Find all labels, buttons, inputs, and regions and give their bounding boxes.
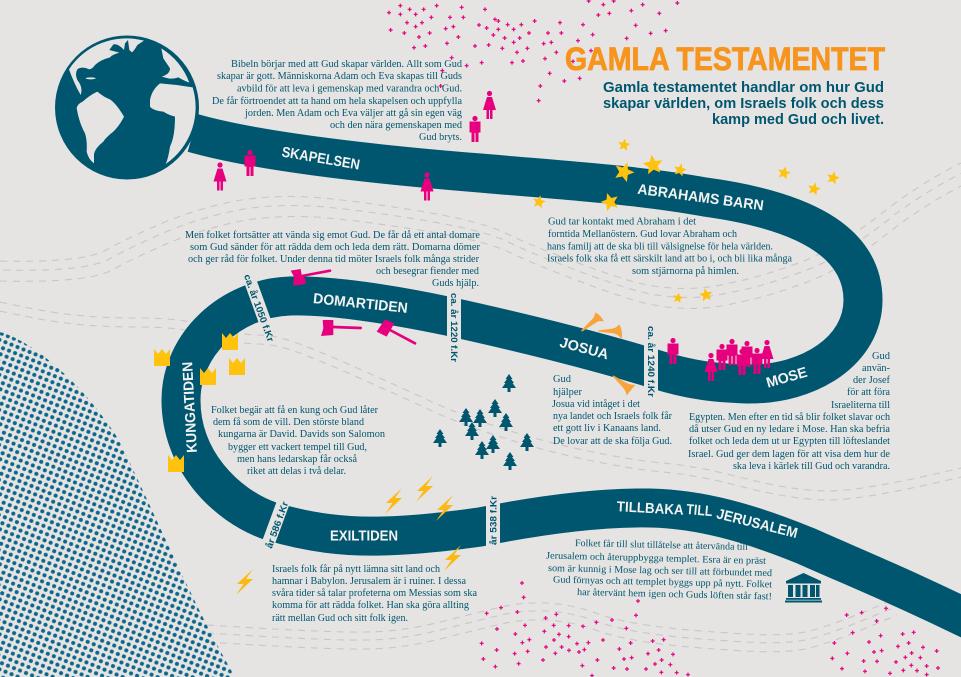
text: Skapelsen: jorden. Men Adam och Eva väljer att gå sin egen väg (244, 108, 462, 119)
text: Exiltiden (272, 564, 478, 624)
text: Kungatiden: riket att delas i två delar. (247, 466, 346, 477)
text: Domartiden: som Gud sänder för att rädda dem och leda dem rätt. Domarna dömer (190, 242, 481, 253)
text: Exiltiden: rätt mellan Gud och sitt folk igen. (272, 613, 408, 624)
icons: trumpets (581, 312, 635, 396)
icon: temple (785, 573, 822, 602)
icons: pink figures along creation road (214, 91, 496, 200)
text: Mose: Israel. Gud ger dem lagen för att visa dem hur de (688, 449, 891, 460)
subtitle (603, 79, 884, 128)
scattered plus signs top (387, 0, 679, 103)
subtitle: kamp med Gud och livet. (712, 111, 884, 128)
text: Mose: ska leva i kärlek till Gud och varandra. (733, 461, 890, 472)
text: Kungatiden: men hans ledarskap får också (237, 454, 358, 465)
text: Kungatiden: bygger ett vackert tempel till Gud, (228, 442, 367, 453)
text: Skapelsen: De får förtroendet att ta hand om hela skapelsen och uppfylla (212, 96, 463, 107)
text: Tillbaka till Jerusalem: har återvänt hem igen och Guds löften står fast! (577, 587, 772, 602)
text: Josua (552, 374, 673, 447)
text: Domartiden (185, 230, 481, 289)
text: Mose: Israeliterna till (831, 400, 890, 411)
text: Josua: Josua vid intåget i det (552, 399, 640, 410)
text: Josua: hjälper (553, 387, 583, 398)
text: Kungatiden: kungarna är David. Davids son Salomon (218, 429, 385, 440)
text: Abrahams barn: Gud tar kontakt med Abraham i det (548, 216, 696, 228)
text: Mose (688, 351, 891, 472)
text: Mose: använ- (862, 363, 890, 374)
text: Domartiden: Men folket fortsätter att vända sig emot Gud. De får då ett antal domare (185, 230, 481, 241)
label: Tillbaka till Jerusalem: TILLBAKA (616, 499, 685, 519)
scattered plus signs bottom (480, 581, 940, 677)
text: Exiltiden: komma för att rädda folket. Han ska göra allting (272, 600, 469, 611)
text: Tillbaka till Jerusalem (546, 538, 772, 602)
text: Josua: ett gott liv i Kanaans land. (553, 423, 661, 434)
text: Abrahams barn: hans familj att de ska bli till välsignelse för hela världen. (547, 242, 773, 252)
label: Tillbaka till Jerusalem: JERUSALEM (715, 506, 799, 542)
date: 1050: ca. år 1050 f.Kr (241, 273, 276, 344)
text: Exiltiden: Israels folk får på nytt lämna sitt land och (272, 564, 440, 575)
text: Tillbaka till Jerusalem: som är kunnig i Mose lag och ser till att förbundet med (548, 563, 772, 579)
label: Abrahams barn: ABRAHAMS BARN (637, 182, 765, 214)
text: Exiltiden: svåra tider så talar profeterna om Messias som ska (272, 588, 478, 599)
winding road (181, 133, 961, 630)
text: Kungatiden: Folket begär att få en kung och Gud låter (211, 405, 379, 416)
text: Skapelsen: avbild för att leva i gemenskap med varandra och Gud. (237, 84, 462, 94)
icons: forest (433, 374, 534, 470)
label: Exiltiden: EXILTIDEN (330, 528, 398, 544)
label: Tillbaka till Jerusalem (616, 499, 799, 542)
text: Mose: Gud (872, 351, 890, 362)
text: Mose: folket och leda dem ut ur Egypten till löfteslandet (689, 436, 890, 447)
text: Abrahams barn: forntida Mellanöstern. Gud lovar Abraham och (548, 229, 737, 240)
date: 1220: ca. år 1220 f.Kr (448, 293, 459, 362)
text: Skapelsen: skapar är gott. Människorna Adam och Eva skapas till Guds (217, 71, 462, 82)
text: Domartiden: och ger råd för folket. Under denna tid möter Israels folk många strider (188, 254, 480, 265)
date labels (241, 273, 656, 550)
text: Abrahams barn: Israels folk ska få ett särskilt land att bo i, och bli lika många (547, 254, 793, 264)
dotted land area (0, 325, 240, 677)
text: Josua: Gud (553, 374, 571, 385)
label: Domartiden: DOMARTIDEN (312, 291, 408, 317)
text: Skapelsen: Gud bryts. (419, 132, 462, 143)
date: 1240: ca. år 1240 f.Kr (645, 326, 656, 397)
text: Mose: då utser Gud en ny ledare i Mose. Han ska befria (689, 424, 891, 435)
text: Mose: der Josef (853, 375, 891, 386)
icons: crowns (154, 333, 245, 472)
icons: lightning bolts (236, 476, 461, 595)
icons: stars (532, 138, 841, 303)
text: Mose: Egypten. Men efter en tid så blir folket slavar och (689, 412, 890, 423)
label: Mose: MOSE (765, 365, 810, 392)
text: Skapelsen: Bibeln börjar med att Gud skapar världen. Allt som Gud (231, 59, 462, 70)
hammer right (377, 319, 415, 343)
text: Abrahams barn (547, 216, 793, 277)
text: Tillbaka till Jerusalem: Jerusalem och återuppbygga templet. Esra är en präst (546, 551, 766, 567)
text: Domartiden: och besegrar fiender med (376, 266, 479, 277)
text: Kungatiden (211, 405, 385, 477)
text: Josua: nya landet och Israels folk får (553, 411, 673, 422)
text: Skapelsen: och den nära gemenskapen med (330, 120, 462, 131)
text: Abrahams barn: som stjärnorna på himlen. (632, 266, 739, 277)
text: Tillbaka till Jerusalem: Gud förnyas och att templet byggs upp på nytt. Folket (553, 575, 772, 590)
label: Skapelsen: SKAPELSEN (280, 145, 361, 174)
hammer middle (321, 320, 361, 336)
date: 538: år 538 f.Kr (488, 496, 500, 545)
icons: crowd of people at Mose (668, 338, 774, 381)
label: Tillbaka till Jerusalem: TILL (686, 502, 713, 520)
title: GAMLA TESTAMENTET (565, 41, 885, 77)
text: Kungatiden: dem få som de vill. Den störste bland (213, 417, 364, 428)
label: Kungatiden: KUNGATIDEN (180, 361, 201, 453)
label: Josua: JOSUA (558, 335, 611, 363)
text: Skapelsen (212, 59, 463, 143)
text: Domartiden: Guds hjälp. (432, 278, 479, 289)
icons: judges' hammers (291, 269, 415, 343)
road labels (180, 145, 810, 544)
date: 586: år 586 f.Kr (264, 500, 291, 550)
text: Tillbaka till Jerusalem: Folket får till slut tillåtelse att återvända till (575, 538, 748, 553)
text: Exiltiden: hamnar i Babylon. Jerusalem är i ruiner. I dessa (272, 576, 467, 587)
subtitle: Gamla testamentet handlar om hur Gud (603, 79, 884, 96)
hammer top (291, 269, 330, 286)
text: Mose: för att föra (847, 387, 891, 398)
text: Josua: De lovar att de ska följa Gud. (553, 436, 672, 447)
subtitle: skapar världen, om Israels folk och dess (603, 95, 884, 112)
globe (55, 36, 199, 180)
